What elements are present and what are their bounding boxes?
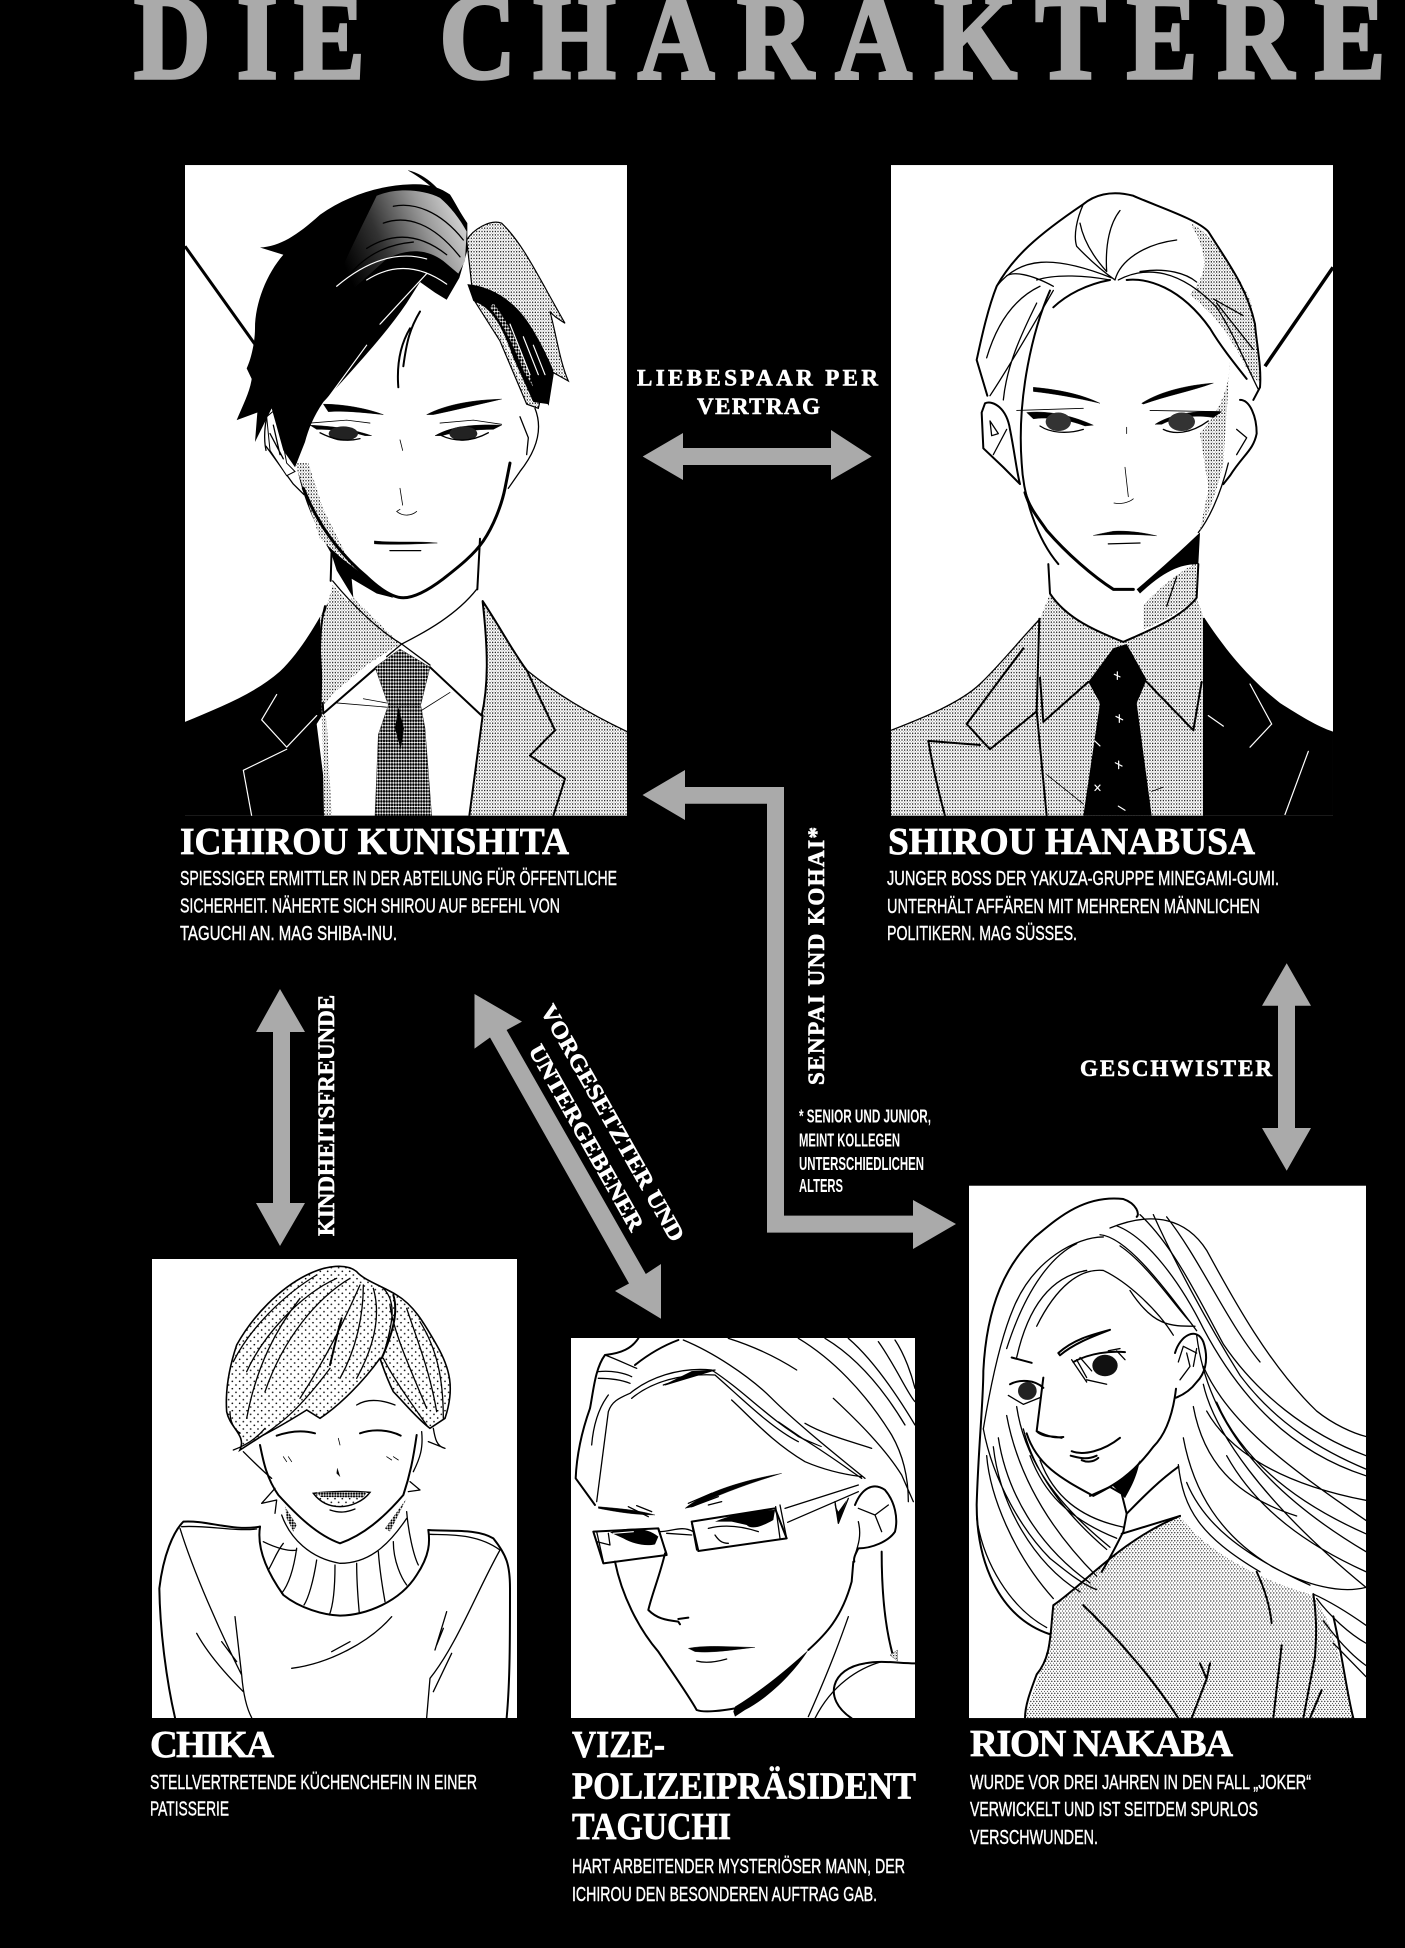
label: Vorgesetzter und Untergebener: UNTERGEBENER <box>524 1040 649 1236</box>
caption: Rion Nakaba <box>970 1723 1311 1849</box>
collar and tie <box>320 602 487 816</box>
label: Geschwister: GESCHWISTER <box>1080 1056 1272 1081</box>
coat <box>1025 1516 1353 1718</box>
label: Liebespaar per Vertrag: LIEBESPAAR PER <box>637 366 878 391</box>
footnote: MEINT KOLLEGEN <box>799 1131 900 1151</box>
description: VERWICKELT UND IST SEITDEM SPURLOS <box>970 1798 1258 1821</box>
eyes and brows <box>310 399 502 441</box>
footnote: UNTERSCHIEDLICHEN <box>799 1154 924 1174</box>
eyes and brows <box>1017 383 1222 432</box>
caption: Ichirou Kunishita <box>180 821 617 945</box>
panel frame line <box>1265 267 1333 366</box>
description: UNTERHÄLT AFFÄREN MIT MEHREREN MÄNNLICHEN <box>887 895 1260 918</box>
description <box>150 1771 477 1820</box>
name: POLIZEIPRÄSIDENT <box>572 1766 916 1808</box>
arrow: Liebespaar per Vertrag <box>643 430 872 480</box>
hair <box>576 1338 915 1505</box>
arrow: Senpai und Kohai <box>642 770 956 1249</box>
description: SICHERHEIT. NÄHERTE SICH SHIROU AUF BEFEHL VON <box>180 895 560 918</box>
collar and neck <box>1090 1460 1180 1572</box>
portrait: Rion Nakaba <box>969 1186 1366 1718</box>
neck and face <box>1025 362 1230 642</box>
hair <box>226 1266 450 1450</box>
caption: Vize-Polizeipräsident Taguchi <box>572 1724 916 1906</box>
shirt and tie <box>1037 594 1204 816</box>
name: VIZE- <box>572 1724 665 1766</box>
brows <box>598 1473 782 1517</box>
face <box>615 1553 853 1717</box>
face <box>243 1400 445 1543</box>
description <box>180 867 617 945</box>
portrait: Chika <box>152 1259 517 1718</box>
jacket <box>185 598 627 816</box>
neck and face <box>295 440 510 703</box>
ear and neck <box>815 1486 915 1718</box>
portrait: Ichirou Kunishita <box>185 165 627 816</box>
ears <box>265 406 539 495</box>
arrow: Geschwister <box>1262 963 1311 1171</box>
ear <box>1175 1334 1206 1398</box>
eyes <box>610 1510 775 1545</box>
label: Liebespaar per Vertrag <box>637 366 878 419</box>
description: HART ARBEITENDER MYSTERIÖSER MANN, DER <box>572 1855 905 1878</box>
footnote <box>799 1107 931 1196</box>
name: SHIROU HANABUSA <box>888 821 1255 863</box>
footnote: ALTERS <box>799 1176 843 1196</box>
description: ICHIROU DEN BESONDEREN AUFTRAG GAB. <box>572 1883 877 1906</box>
hair <box>977 193 1260 564</box>
arrow: Vorgesetzter und Untergebener <box>474 994 661 1319</box>
ears <box>982 400 1257 484</box>
jacket <box>891 619 1333 816</box>
label: Kindheitsfreunde: KINDHEITSFREUNDE <box>314 995 339 1236</box>
name: RION NAKABA <box>970 1723 1233 1765</box>
caption: Chika <box>150 1724 477 1820</box>
label: Liebespaar per Vertrag: VERTRAG <box>697 394 820 419</box>
description <box>572 1855 905 1906</box>
sweater <box>159 1498 510 1718</box>
label: Vorgesetzter und Untergebener: VORGESETZTER UND <box>536 1000 689 1246</box>
portrait: Vize-Polizeipräsident Taguchi <box>571 1338 915 1718</box>
name <box>572 1724 916 1848</box>
eyes <box>1008 1349 1125 1404</box>
description: TAGUCHI AN. MAG SHIBA-INU. <box>180 922 397 945</box>
caption: Shirou Hanabusa <box>887 821 1279 945</box>
name: ICHIROU KUNISHITA <box>180 821 569 863</box>
arrow: Kindheitsfreunde <box>256 989 305 1246</box>
footnote: * SENIOR UND JUNIOR, <box>799 1107 931 1127</box>
hair <box>977 1198 1366 1677</box>
name: CHIKA <box>150 1724 274 1766</box>
description: VERSCHWUNDEN. <box>970 1826 1098 1849</box>
description: PATISSERIE <box>150 1798 229 1820</box>
hair <box>237 171 568 467</box>
description <box>970 1771 1311 1849</box>
description: POLITIKERN. MAG SÜSSES. <box>887 922 1077 945</box>
panel frame line <box>185 246 255 344</box>
description: STELLVERTRETENDE KÜCHENCHEFIN IN EINER <box>150 1771 477 1794</box>
description: SPIESSIGER ERMITTLER IN DER ABTEILUNG FÜR ÖFFENTLICHE <box>180 867 617 890</box>
glasses <box>593 1485 858 1563</box>
name: TAGUCHI <box>572 1806 731 1848</box>
face <box>1012 1330 1176 1496</box>
portrait: Shirou Hanabusa <box>891 165 1333 816</box>
description <box>887 867 1279 945</box>
label: Senpai und Kohai: SENPAI UND KOHAI* <box>804 827 829 1085</box>
